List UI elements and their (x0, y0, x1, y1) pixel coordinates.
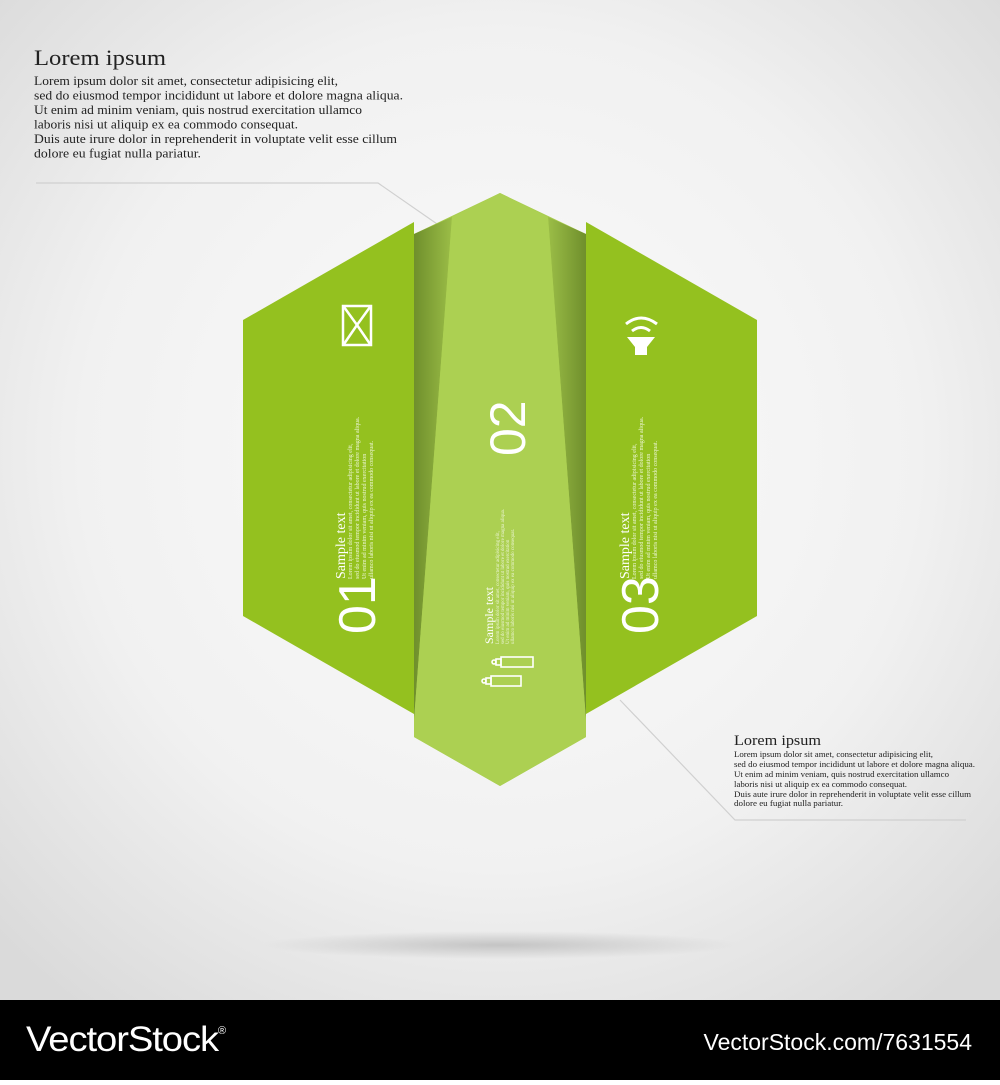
panel: left 01 (243, 222, 414, 714)
panel: middle 02 (414, 193, 586, 786)
callout bottom-right: laboris nisi ut aliquip ex ea commodo consequat. (734, 779, 907, 789)
callout bottom-right: Duis aute irure dolor in reprehenderit in voluptate velit esse cillum (734, 789, 971, 799)
callout bottom-right (734, 733, 975, 808)
title block top-left: Lorem ipsum dolor sit amet, consectetur adipisicing elit, (34, 74, 338, 88)
title block top-left (34, 45, 403, 160)
panel: middle 02: sed do eiusmod tempor incididunt ut labore et dolore magna aliqua. (501, 509, 506, 644)
connector line top (36, 183, 440, 226)
footer bar: VectorStock.com/7631554 (704, 1029, 972, 1055)
callout bottom-right: Lorem ipsum (734, 733, 822, 749)
title block top-left: laboris nisi ut aliquip ex ea commodo consequat. (34, 118, 298, 132)
title block top-left: Duis aute irure dolor in reprehenderit in voluptate velit esse cillum (34, 132, 397, 146)
connector line bottom (620, 700, 966, 820)
footer bar (0, 1000, 1000, 1080)
title block top-left: sed do eiusmod tempor incididunt ut labore et dolore magna aliqua. (34, 88, 403, 102)
panel: right 03: sed do eiusmod tempor incididunt ut labore et dolore magna aliqua. (639, 416, 645, 579)
panel: middle 02: 02 (480, 400, 536, 456)
panel: right 03: ullamco laboris nisi ut aliquip ex ea commodo consequat. (653, 440, 659, 579)
panel: middle 02: ullamco laboris nisi ut aliquip ex ea commodo consequat. (511, 529, 516, 644)
callout bottom-right: dolore eu fugiat nulla pariatur. (734, 798, 843, 808)
shadow under hexagon (260, 931, 740, 959)
panel: left 01: sed do eiusmod tempor incididunt ut labore et dolore magna aliqua. (355, 416, 361, 579)
panel: right 03: Ut enim ad minim veniam, quis nostrud exercitation (646, 454, 652, 579)
panel: right 03: 03 (612, 576, 670, 634)
footer bar: ® (218, 1025, 226, 1037)
callout bottom-right: sed do eiusmod tempor incididunt ut labore et dolore magna aliqua. (734, 759, 975, 769)
panel: left 01: ullamco laboris nisi ut aliquip ex ea commodo consequat. (369, 440, 375, 579)
icon: envelope (343, 306, 371, 345)
footer bar: VectorStock (26, 1020, 220, 1059)
panel: left 01: Ut enim ad minim veniam, quis nostrud exercitation (362, 454, 368, 579)
panel: middle 02: Sample text (482, 586, 496, 644)
title block top-left: Lorem ipsum (34, 45, 166, 70)
panel: middle 02: Ut enim ad minim veniam, quis nostrud exercitation (506, 539, 511, 644)
panel: left 01: Sample text (334, 512, 349, 579)
panel: right 03: Sample text (618, 512, 633, 579)
panel: right 03 (586, 222, 757, 714)
icon: speaker (626, 318, 657, 355)
panel: left 01: Lorem ipsum dolor sit amet, consectetur adipisicing elit, (348, 443, 354, 579)
callout bottom-right: Ut enim ad minim veniam, quis nostrud exercitation ullamco (734, 769, 949, 779)
icon: plugs (482, 657, 533, 686)
panel: middle 02: Lorem ipsum dolor sit amet, consectetur adipisicing elit, (496, 531, 501, 644)
title block top-left: Ut enim ad minim veniam, quis nostrud exercitation ullamco (34, 103, 362, 117)
title block top-left: dolore eu fugiat nulla pariatur. (34, 146, 201, 160)
panel: left 01: 01 (329, 576, 387, 634)
panel: right 03: Lorem ipsum dolor sit amet, consectetur adipisicing elit, (632, 443, 638, 579)
callout bottom-right: Lorem ipsum dolor sit amet, consectetur adipisicing elit, (734, 749, 933, 759)
